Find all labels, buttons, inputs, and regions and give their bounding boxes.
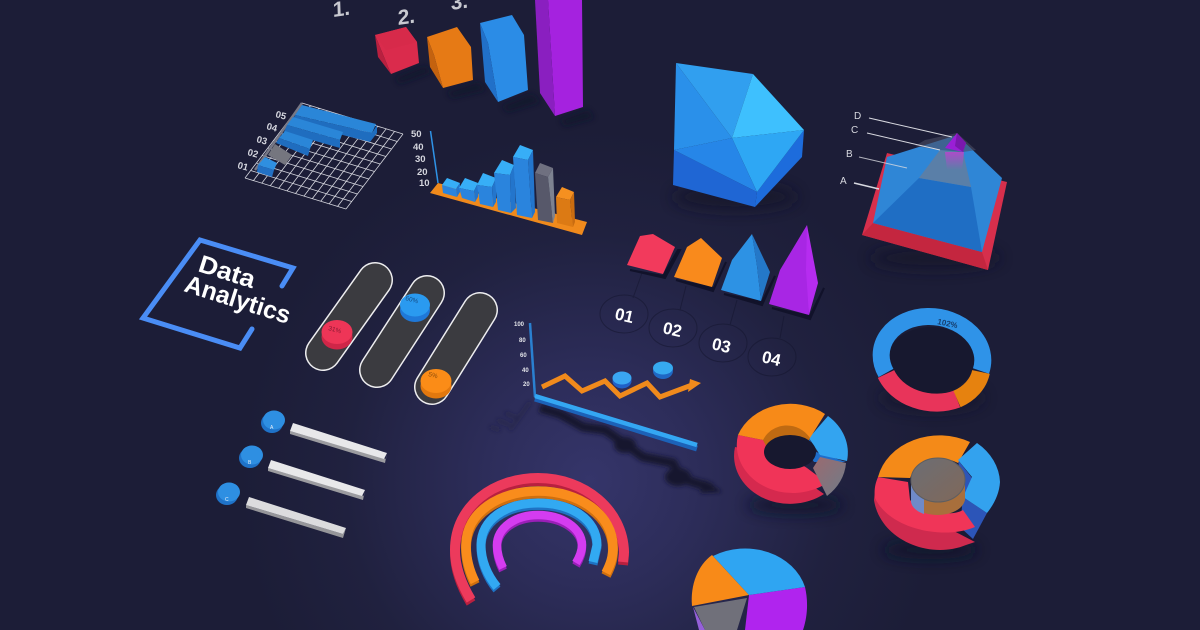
orange arc — [466, 491, 613, 584]
red disc — [322, 320, 352, 350]
number labels — [613, 304, 783, 370]
red shape — [627, 234, 675, 274]
axis labels: 30 — [415, 154, 426, 165]
red arc — [455, 478, 624, 603]
orange disc — [420, 369, 452, 398]
connector lines and circles — [600, 273, 796, 376]
callout labels: B — [846, 149, 853, 160]
columns — [442, 145, 575, 227]
glass layer — [919, 150, 971, 187]
column chart — [411, 129, 587, 235]
orange trend arrow — [542, 376, 701, 397]
purple arc — [497, 515, 582, 570]
callout lines — [854, 118, 952, 189]
red segment — [875, 477, 975, 533]
round markers: A — [270, 425, 274, 431]
blue shape — [721, 234, 770, 301]
number labels: 01 — [613, 304, 636, 327]
axis labels: 01 — [236, 160, 250, 174]
ring segments — [881, 317, 983, 373]
axis — [530, 323, 535, 397]
tick labels: 20 — [523, 382, 530, 388]
data analytics frame — [143, 240, 294, 348]
blue markers — [612, 362, 673, 388]
blue segment — [958, 443, 1000, 513]
orange shape — [674, 238, 722, 287]
shadows — [395, 66, 594, 126]
axis — [430, 131, 438, 183]
number labels: 04 — [760, 347, 783, 370]
purple bar — [535, 0, 583, 116]
base — [430, 183, 587, 235]
red disc: 31% — [327, 325, 342, 335]
blue disc: 60% — [404, 295, 419, 305]
axis labels — [236, 109, 288, 174]
round markers: B — [248, 460, 252, 466]
bar 02 — [268, 144, 292, 165]
ground shadow — [490, 402, 722, 493]
blue side — [960, 497, 987, 539]
axis labels: 40 — [413, 142, 424, 153]
blue segment — [806, 416, 848, 462]
red segment — [737, 435, 827, 493]
tick labels: 60 — [520, 353, 527, 359]
glass cylinder — [911, 458, 965, 515]
number labels: 03 — [710, 334, 733, 357]
round markers: C — [225, 497, 229, 503]
blue slice — [713, 548, 805, 595]
tick labels: 40 — [522, 368, 529, 374]
hole — [764, 435, 816, 469]
legend bars — [216, 410, 387, 538]
shadows — [630, 250, 824, 319]
pie chart — [692, 548, 807, 630]
ranked 3D bars — [332, 0, 594, 126]
horizontal bars on grid — [236, 103, 403, 209]
bar 01 — [257, 157, 277, 177]
numbered shapes — [600, 225, 824, 376]
top ring chart — [880, 317, 984, 412]
red depth — [874, 490, 975, 550]
thin purple edge — [693, 607, 705, 630]
axis labels: 20 — [417, 167, 428, 178]
red base — [862, 153, 1007, 270]
bar 04 — [284, 117, 343, 148]
red cube — [375, 27, 419, 74]
glass segment — [813, 457, 846, 496]
round markers — [216, 410, 285, 505]
blue disc — [400, 294, 430, 322]
orange segment — [738, 404, 825, 446]
axis labels: 05 — [274, 109, 288, 123]
axis labels: 50 — [411, 129, 422, 140]
orange segment — [878, 435, 970, 478]
bar 05 — [292, 105, 377, 142]
axis labels: 04 — [265, 121, 279, 135]
donut chart two — [874, 435, 1000, 559]
slider pills — [322, 280, 480, 398]
line chart — [490, 322, 722, 493]
orange disc: 5% — [427, 371, 439, 380]
axis — [255, 103, 302, 170]
orange slice — [692, 555, 749, 606]
bar rows — [246, 423, 387, 538]
red depth — [734, 447, 824, 504]
layered pyramid — [840, 111, 1007, 270]
blue bar — [480, 15, 528, 102]
tick labels: 80 — [519, 338, 526, 344]
number labels: 02 — [661, 318, 684, 341]
frame title: Data — [195, 250, 259, 294]
ring label: 102% — [937, 317, 958, 330]
grey slice — [694, 598, 747, 630]
faceted polyhedron — [673, 63, 804, 211]
axis labels: 02 — [246, 147, 259, 161]
base axis — [535, 396, 697, 448]
tick labels: 100 — [514, 322, 525, 328]
callout labels — [840, 111, 861, 187]
callout labels: D — [854, 111, 861, 122]
axis labels: 03 — [255, 134, 268, 148]
callout labels: A — [840, 176, 847, 187]
rank labels: 2. — [397, 5, 416, 30]
donut chart one — [734, 404, 848, 514]
frame title: Analytics — [181, 270, 294, 330]
purple slice — [745, 587, 807, 630]
tick labels — [514, 322, 530, 388]
axis labels — [411, 129, 430, 189]
purple tip — [945, 133, 966, 152]
orange bar — [427, 27, 473, 88]
bar 03 — [276, 131, 313, 156]
grid — [245, 103, 403, 209]
blue arc — [481, 503, 597, 590]
rainbow arcs — [455, 478, 624, 603]
axis labels: 10 — [419, 178, 430, 189]
callout labels: C — [851, 125, 858, 136]
rank labels — [332, 0, 469, 30]
purple shape — [769, 225, 818, 315]
blue layer — [873, 135, 1002, 252]
